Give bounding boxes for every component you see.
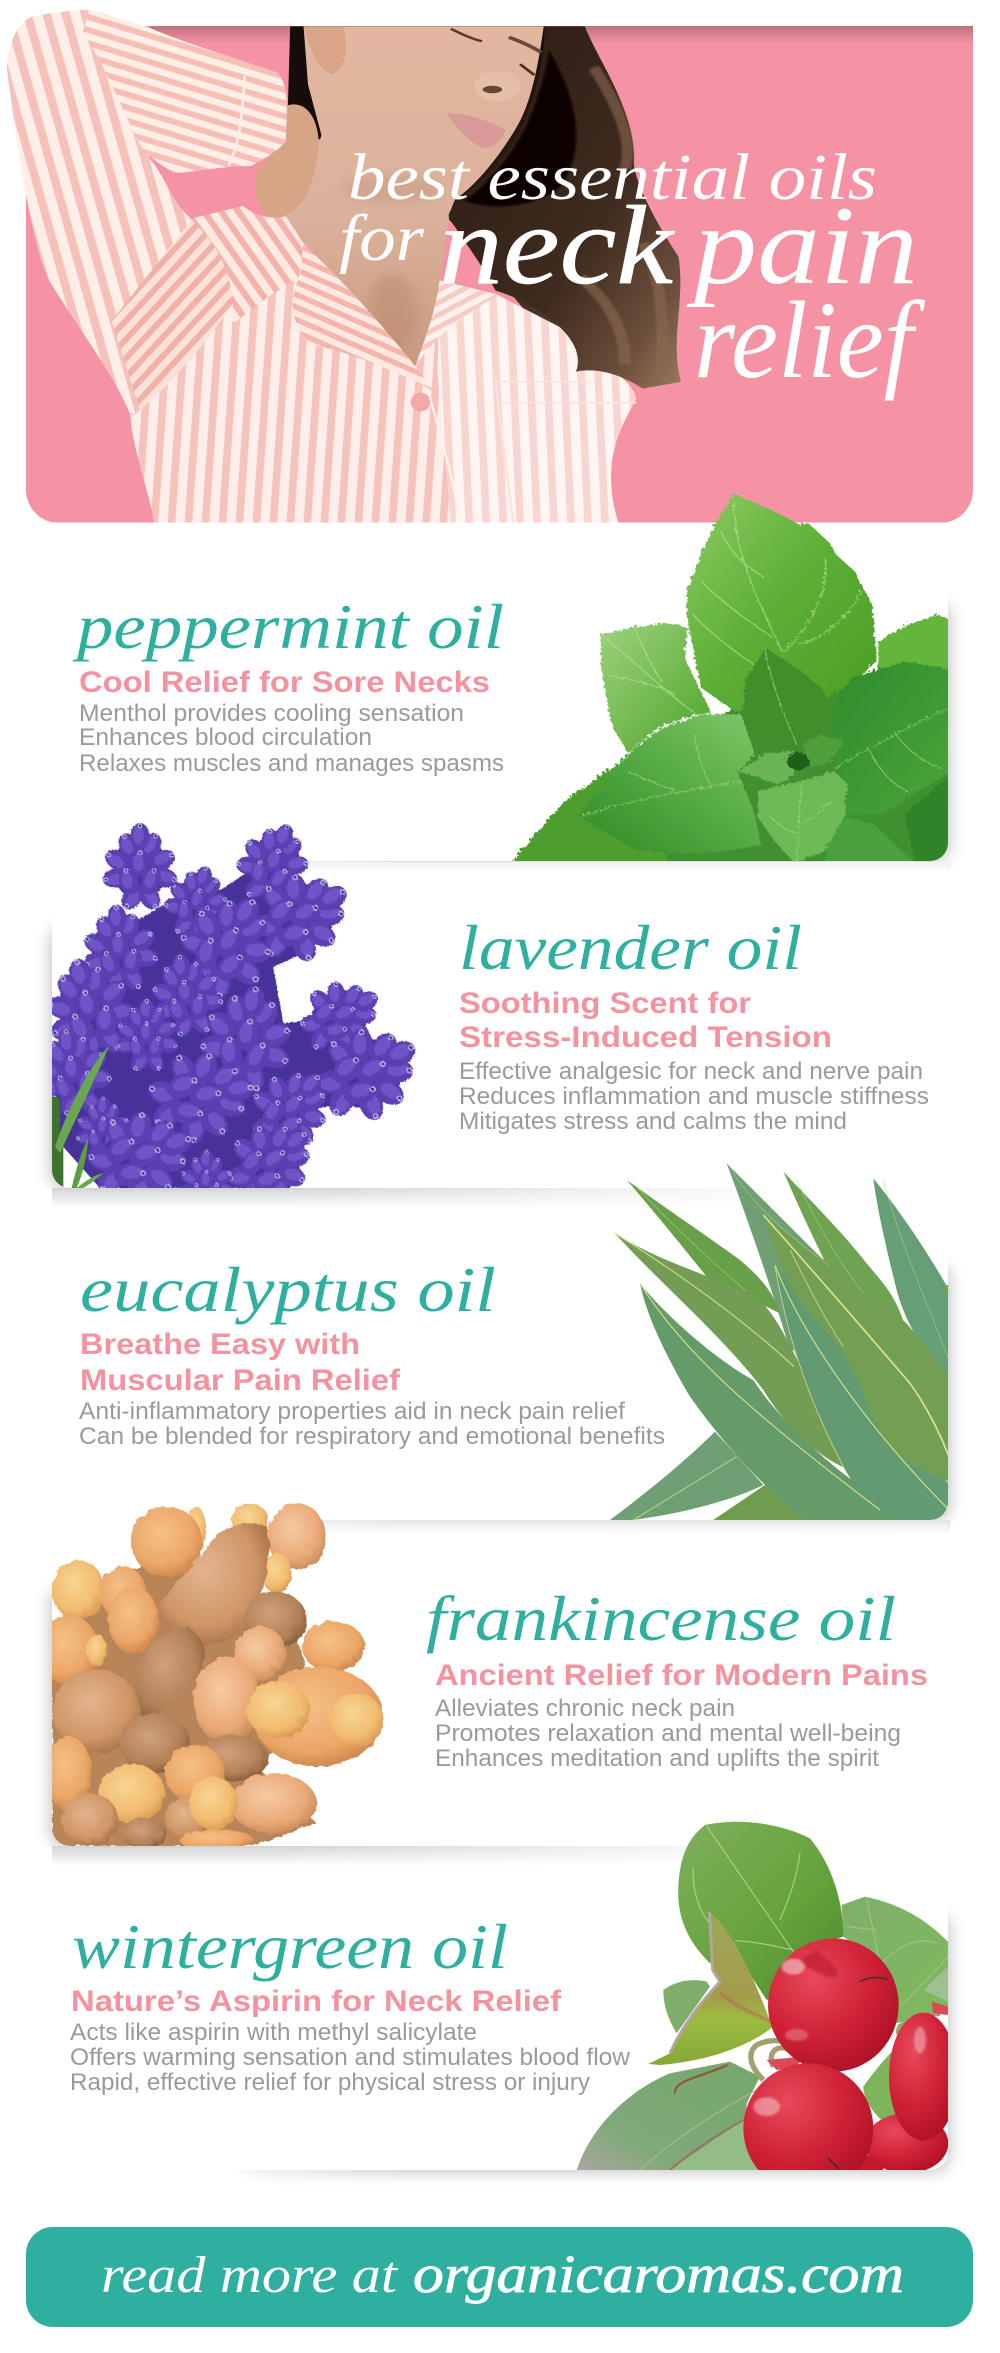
text block: wintergreen benefits <box>70 2019 631 2096</box>
armpit folds <box>112 220 232 419</box>
icon: eucalyptus leaves <box>610 1163 949 1520</box>
text block: lavender benefits: Effective analgesic for neck and nerve pain <box>459 1058 923 1085</box>
hero top shadow <box>150 26 973 42</box>
subheading: breathe easy: Muscular Pain Relief <box>80 1364 401 1397</box>
text block: wintergreen benefits: Acts like aspirin with methyl salicylate <box>70 2019 477 2046</box>
heading: wintergreen oil: wintergreen oil <box>72 1911 508 1982</box>
right collar <box>415 280 498 367</box>
hero title: for <box>339 202 424 275</box>
card shadow eucalyptus <box>932 1262 958 1522</box>
call to action text <box>101 2244 904 2304</box>
icon: lavender flowers <box>52 823 416 1188</box>
subheading: breathe easy <box>80 1328 401 1397</box>
hand on neck <box>256 104 319 218</box>
text block: lavender benefits <box>459 1058 929 1135</box>
face and neck <box>286 26 544 367</box>
card shadow frankincense <box>42 1584 68 1846</box>
shoulder and left collar <box>190 206 304 324</box>
hair front strands <box>449 26 681 388</box>
cast shadow from frankincense card <box>52 1846 687 1862</box>
hero panel <box>7 9 973 523</box>
hero title: neck <box>439 184 676 308</box>
icon: wintergreen berries <box>577 1822 958 2193</box>
text block: wintergreen benefits: Rapid, effective relief for physical stress or injury <box>70 2069 590 2096</box>
heading: peppermint oil: peppermint oil <box>72 591 504 662</box>
text block: frankincense benefits: Alleviates chronic neck pain <box>435 1695 735 1722</box>
hair back <box>288 26 681 388</box>
text block: peppermint benefits: Enhances blood circulation <box>79 724 372 751</box>
call to action text: organicaromas.com <box>413 2244 904 2304</box>
heading: lavender oil: lavender oil <box>459 912 802 983</box>
panel: peppermint oil <box>72 493 950 862</box>
text block: lavender benefits: Mitigates stress and calms the mind <box>459 1108 847 1135</box>
subheading: nature's aspirin: Nature’s Aspirin for Neck Relief <box>71 1985 562 2018</box>
text block: peppermint benefits: Relaxes muscles and manages spasms <box>79 750 504 777</box>
text block: frankincense benefits: Promotes relaxation and mental well-being <box>435 1720 901 1747</box>
ear <box>304 26 346 74</box>
text block: eucalyptus benefits: Anti-inflammatory properties aid in neck pain relief <box>79 1398 625 1425</box>
subheading: soothing scent <box>459 987 832 1054</box>
hero pink background <box>26 26 973 523</box>
text block: lavender benefits: Reduces inflammation and muscle stiffness <box>459 1083 929 1110</box>
sleeve and upper arm <box>7 9 232 419</box>
hero title: relief <box>694 279 926 401</box>
text block: eucalyptus benefits <box>79 1398 665 1450</box>
text block: wintergreen benefits: Offers warming sensation and stimulates blood flow <box>70 2044 631 2071</box>
shirt body <box>129 247 636 523</box>
sleeve cuff <box>83 10 287 173</box>
subheading: soothing scent: Stress-Induced Tension <box>459 1021 832 1054</box>
facial features <box>446 29 541 148</box>
icon: frankincense resin <box>38 1503 383 1851</box>
text block: frankincense benefits <box>435 1695 901 1772</box>
call to action banner <box>26 2227 973 2327</box>
card shadow lavender <box>42 924 69 1188</box>
subheading: ancient relief: Ancient Relief for Modern Pains <box>435 1659 928 1692</box>
panel: wintergreen oil <box>30 1822 958 2193</box>
subheading: cool relief: Cool Relief for Sore Necks <box>79 666 490 699</box>
card shadow wintergreen <box>240 1912 950 2172</box>
button placket and pocket <box>411 382 636 523</box>
text block: peppermint benefits <box>79 700 504 777</box>
woman photo illustration <box>7 9 681 523</box>
text block: eucalyptus benefits: Can be blended for respiratory and emotional benefits <box>79 1423 665 1450</box>
heading: eucalyptus oil: eucalyptus oil <box>80 1254 496 1325</box>
card shadow peppermint <box>300 600 950 862</box>
text block: peppermint benefits: Menthol provides cooling sensation <box>79 700 464 727</box>
hero title <box>339 141 926 401</box>
heading: frankincense oil: frankincense oil <box>426 1583 896 1654</box>
cast shadow from lavender card <box>52 1188 697 1204</box>
icon: mint leaves <box>510 493 949 862</box>
text block: frankincense benefits: Enhances meditation and uplifts the spirit <box>435 1745 879 1772</box>
subheading: soothing scent: Soothing Scent for <box>459 987 751 1020</box>
panel: frankincense oil <box>38 1503 950 1851</box>
panel: lavender oil <box>42 823 950 1188</box>
hero title: best essential oils <box>348 141 877 214</box>
panel: eucalyptus oil <box>30 1163 950 1522</box>
card edge shade from peppermint <box>300 862 950 872</box>
call to action text: read more at <box>101 2247 399 2304</box>
cast shadow from eucalyptus card <box>266 1520 950 1530</box>
subheading: breathe easy: Breathe Easy with <box>80 1328 360 1361</box>
hero title: pain <box>686 184 918 308</box>
